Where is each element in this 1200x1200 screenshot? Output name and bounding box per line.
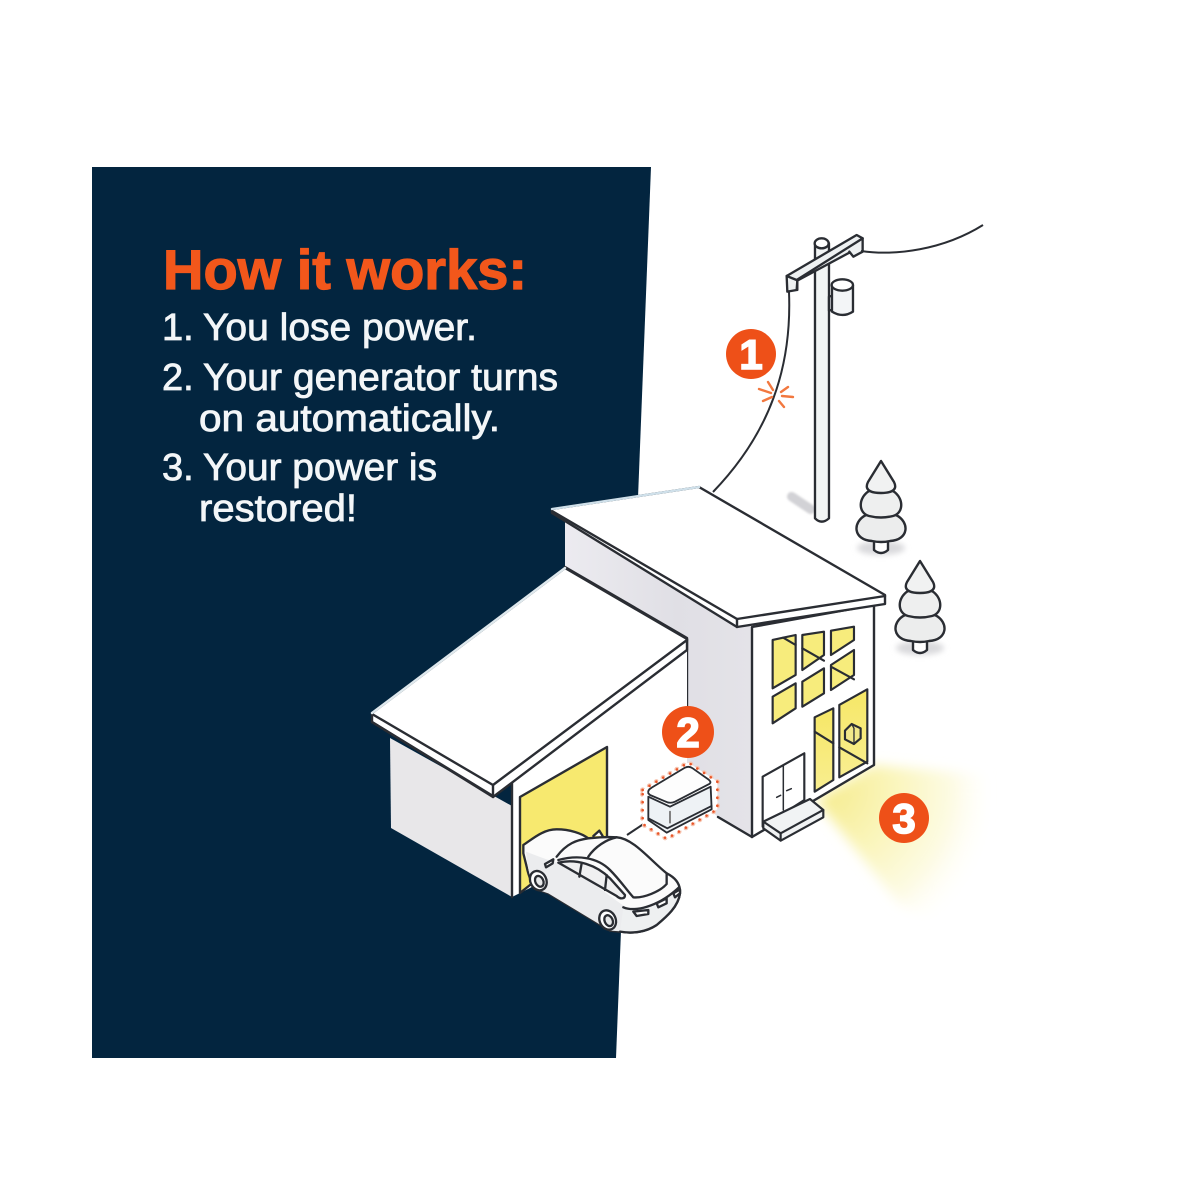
step 3 text: Your power is [203, 447, 437, 489]
car body [523, 829, 680, 933]
step 1 text: You lose power. [203, 307, 477, 349]
utility pole [787, 235, 863, 522]
car [523, 829, 680, 933]
navy panel [92, 167, 651, 1058]
connector line generator to car [627, 823, 645, 835]
upper windows [773, 627, 854, 723]
step 3 text: restored! [199, 488, 357, 530]
garage door [520, 747, 607, 893]
garage [372, 568, 687, 897]
badge 1: 1 [739, 331, 763, 378]
main house [552, 487, 885, 837]
generator body [648, 787, 712, 833]
light cone from doorway [816, 765, 985, 925]
badge 2: 2 [676, 709, 700, 756]
badge 3: 3 [892, 795, 916, 842]
generator [643, 763, 717, 839]
garage roof [372, 568, 687, 797]
step 2 text: on automatically. [199, 398, 500, 440]
icon: spark [759, 382, 793, 407]
garage front wall [512, 650, 687, 897]
car wheels [527, 868, 550, 893]
power line to the street [861, 225, 983, 253]
car roof lines [557, 837, 667, 897]
car lights and mirror [545, 859, 680, 916]
garage side wall [390, 738, 512, 897]
front doors [763, 753, 804, 827]
step 3 text: 3. [162, 447, 194, 489]
tree 1 [856, 461, 906, 555]
step 2 text: 2. [162, 357, 194, 399]
house windows and door [763, 627, 867, 841]
badge 1 [726, 329, 776, 379]
car windows [558, 861, 625, 898]
step 1 text: 1. [162, 307, 194, 349]
title: How it works: [163, 238, 527, 301]
step 2 text [162, 357, 558, 440]
car side panel [526, 852, 625, 932]
dotted highlight [643, 763, 717, 839]
badge 2 [662, 706, 714, 758]
badge 3 [879, 793, 929, 843]
broken power line to house [713, 292, 789, 492]
tree 2 [895, 561, 945, 655]
lamp in window [845, 724, 861, 744]
front step [763, 799, 823, 841]
step 2 text: Your generator turns [203, 357, 558, 399]
tall windows [815, 689, 867, 792]
house side wall [565, 518, 751, 837]
house roof [552, 487, 885, 627]
step 3 text [162, 447, 437, 530]
house front wall [752, 605, 874, 837]
